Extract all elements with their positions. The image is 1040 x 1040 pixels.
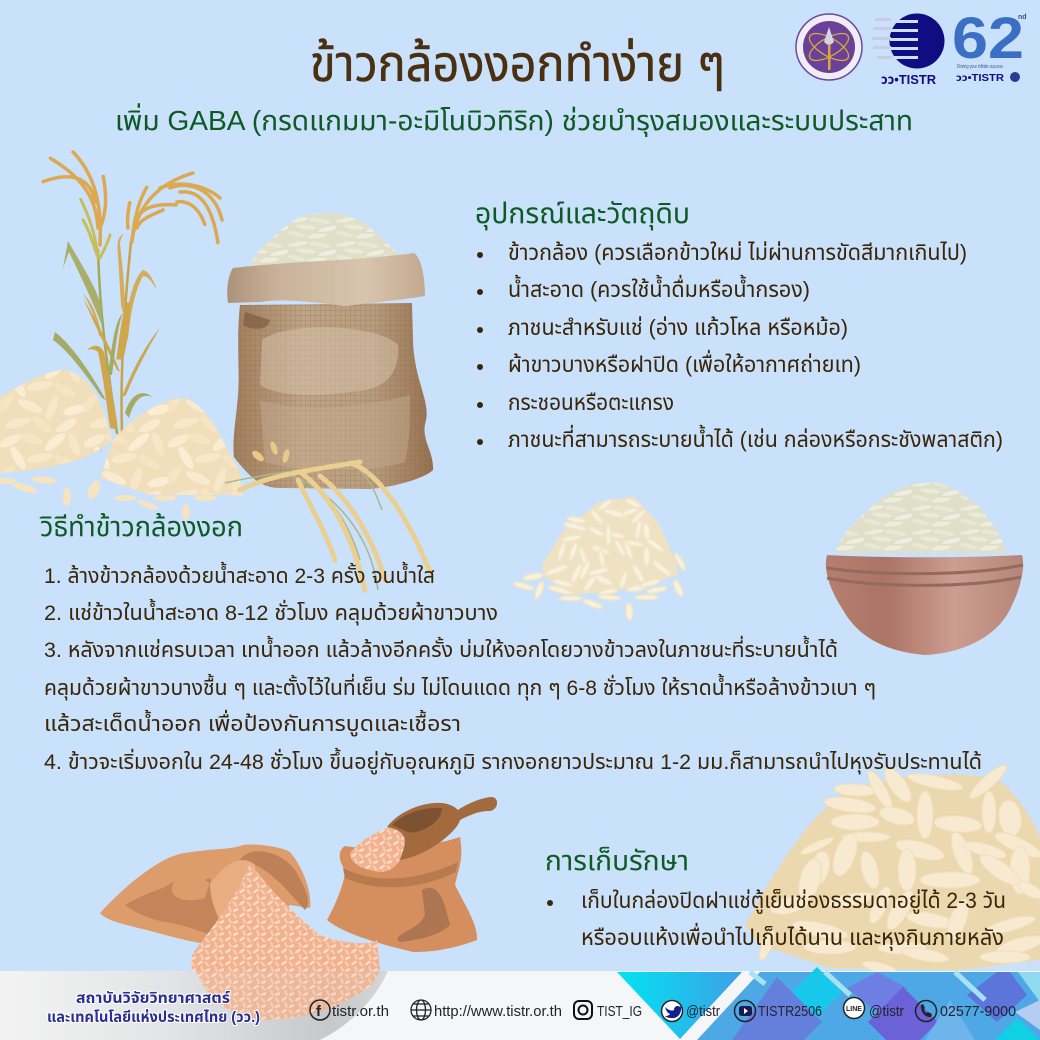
text: steps: 1. ล้างข้าวกล้องด้วยน้ำสะอาด 2-3 ครั้ง จนน้ำใส [44, 561, 435, 588]
title: ข้าวกล้องงอกทำง่าย ๆ [310, 36, 725, 92]
logo: 62nd anniversary: nd [1018, 14, 1027, 21]
icon: line [844, 998, 864, 1018]
logo: 62nd anniversary: วว•TISTR [956, 73, 1005, 84]
text: storage: หรืออบแห้งเพื่อนำไปเก็บได้นาน และหุงกินภายหลัง [581, 922, 1004, 951]
list: equipment and ingredients: ภาชนะที่สามารถระบายน้ำได้ (เช่น กล่องหรือกระชังพลาสติก) [508, 424, 1003, 452]
heading: method: วิธีทำข้าวกล้องงอก [39, 511, 243, 542]
footer: contact links: TIST_IG [597, 1003, 642, 1020]
illustration: rice stalk on ground [225, 440, 430, 590]
icon: youtube [734, 1000, 756, 1022]
footer: institute name [47, 990, 260, 1026]
illustration: rice piles under plant [0, 370, 245, 520]
illustration: rice sack [227, 213, 433, 489]
illustration: rice plant [42, 152, 222, 453]
logo: 62nd anniversary: Driving your infinite success [957, 64, 1003, 70]
text: steps: 4. ข้าวจะเริ่มงอกใน 24-48 ชั่วโมง ขึ้นอยู่กับอุณหภูมิ รากงอกยาวประมาณ 1-2 มม.ก็สามารถนำไปหุงรับประทานได้ [44, 747, 982, 775]
leaves [53, 234, 160, 453]
logo: institute seal [796, 14, 862, 80]
icon: facebook: f [316, 1003, 322, 1020]
subtitle: เพิ่ม GABA (กรดแกมมา-อะมิโนบิวทิริก) ช่วยบำรุงสมองและระบบประสาท [115, 103, 913, 137]
text: steps: คลุมด้วยผ้าขาวบางชื้น ๆ และตั้งไว้ในที่เย็น ร่ม ไม่โดนแดด ทุก ๆ 6-8 ชั่วโมง ให้ราดน้ำหรือล้างข้าวเบา ๆ [44, 673, 876, 701]
text: storage [547, 888, 1006, 951]
icon: twitter [662, 1000, 682, 1022]
icon: line: LINE [846, 1006, 862, 1013]
footer: contact links [310, 998, 1016, 1022]
illustration: bowl of rice [826, 483, 1023, 655]
icon: instagram [574, 1001, 592, 1019]
list: equipment and ingredients: น้ำสะอาด (ควรใช้น้ำดื่มหรือน้ำกรอง) [508, 274, 810, 302]
footer: institute name: สถาบันวิจัยวิทยาศาสตร์ [76, 990, 230, 1007]
icon: globe [411, 1000, 431, 1020]
text: storage: เก็บในกล่องปิดฝาแช่ตู้เย็นช่องธรรมดาอยู่ได้ 2-3 วัน [581, 888, 1006, 914]
list: equipment and ingredients: ภาชนะสำหรับแช่ (อ่าง แก้วโหล หรือหม้อ) [508, 315, 848, 340]
text: steps: แล้วสะเด็ดน้ำออก เพื่อป้องกันการบูดและเชื้อรา [44, 709, 461, 737]
icon: phone [916, 1000, 936, 1022]
footer rice spill [196, 971, 380, 1020]
footer: contact links: tistr.or.th [332, 1003, 389, 1020]
text: steps: 2. แช่ข้าวในน้ำสะอาด 8-12 ชั่วโมง คลุมด้วยผ้าขาวบาง [44, 598, 498, 626]
icon: facebook [310, 1000, 330, 1020]
logo: TISTR [872, 14, 944, 87]
grain heads [42, 152, 222, 245]
heading: storage: การเก็บรักษา [545, 845, 689, 876]
list: equipment and ingredients: ผ้าขาวบางหรือฝาปิด (เพื่อให้อากาศถ่ายเท) [508, 349, 861, 377]
footer: institute name: และเทคโนโลยีแห่งประเทศไทย (วว.) [47, 1008, 260, 1026]
collar [227, 253, 425, 306]
footer: contact links: @tistr [869, 1003, 904, 1020]
footer band [0, 967, 1040, 1040]
list: equipment and ingredients [477, 240, 1003, 452]
footer: contact links: @tistr [686, 1003, 720, 1020]
text: steps: 3. หลังจากแช่ครบเวลา เทน้ำออก แล้วล้างอีกครั้ง บ่มให้งอกโดยวางข้าวลงในภาชนะที่ระบายน้ำได้ [44, 635, 838, 662]
list: equipment and ingredients: กระชอนหรือตะแกรง [508, 390, 674, 415]
footer: contact links: http://www.tistr.or.th [434, 1003, 562, 1020]
heading: equipment: อุปกรณ์และวัตถุดิบ [475, 198, 690, 230]
footer: contact links: TISTR2506 [758, 1003, 822, 1020]
text: steps [44, 561, 982, 775]
logo: 62nd anniversary: 62 [952, 6, 1024, 71]
illustration: brown sacks with rice and scoop [100, 797, 497, 985]
rice on top [250, 213, 398, 270]
illustration: pile of rice bottom right [745, 761, 1040, 977]
illustration: middle rice pile [513, 497, 687, 620]
logo: TISTR: วว•TISTR [881, 72, 937, 87]
footer: contact links: 02577-9000 [940, 1003, 1016, 1020]
list: equipment and ingredients: ข้าวกล้อง (ควรเลือกข้าวใหม่ ไม่ผ่านการขัดสีมากเกินไป) [508, 240, 967, 265]
